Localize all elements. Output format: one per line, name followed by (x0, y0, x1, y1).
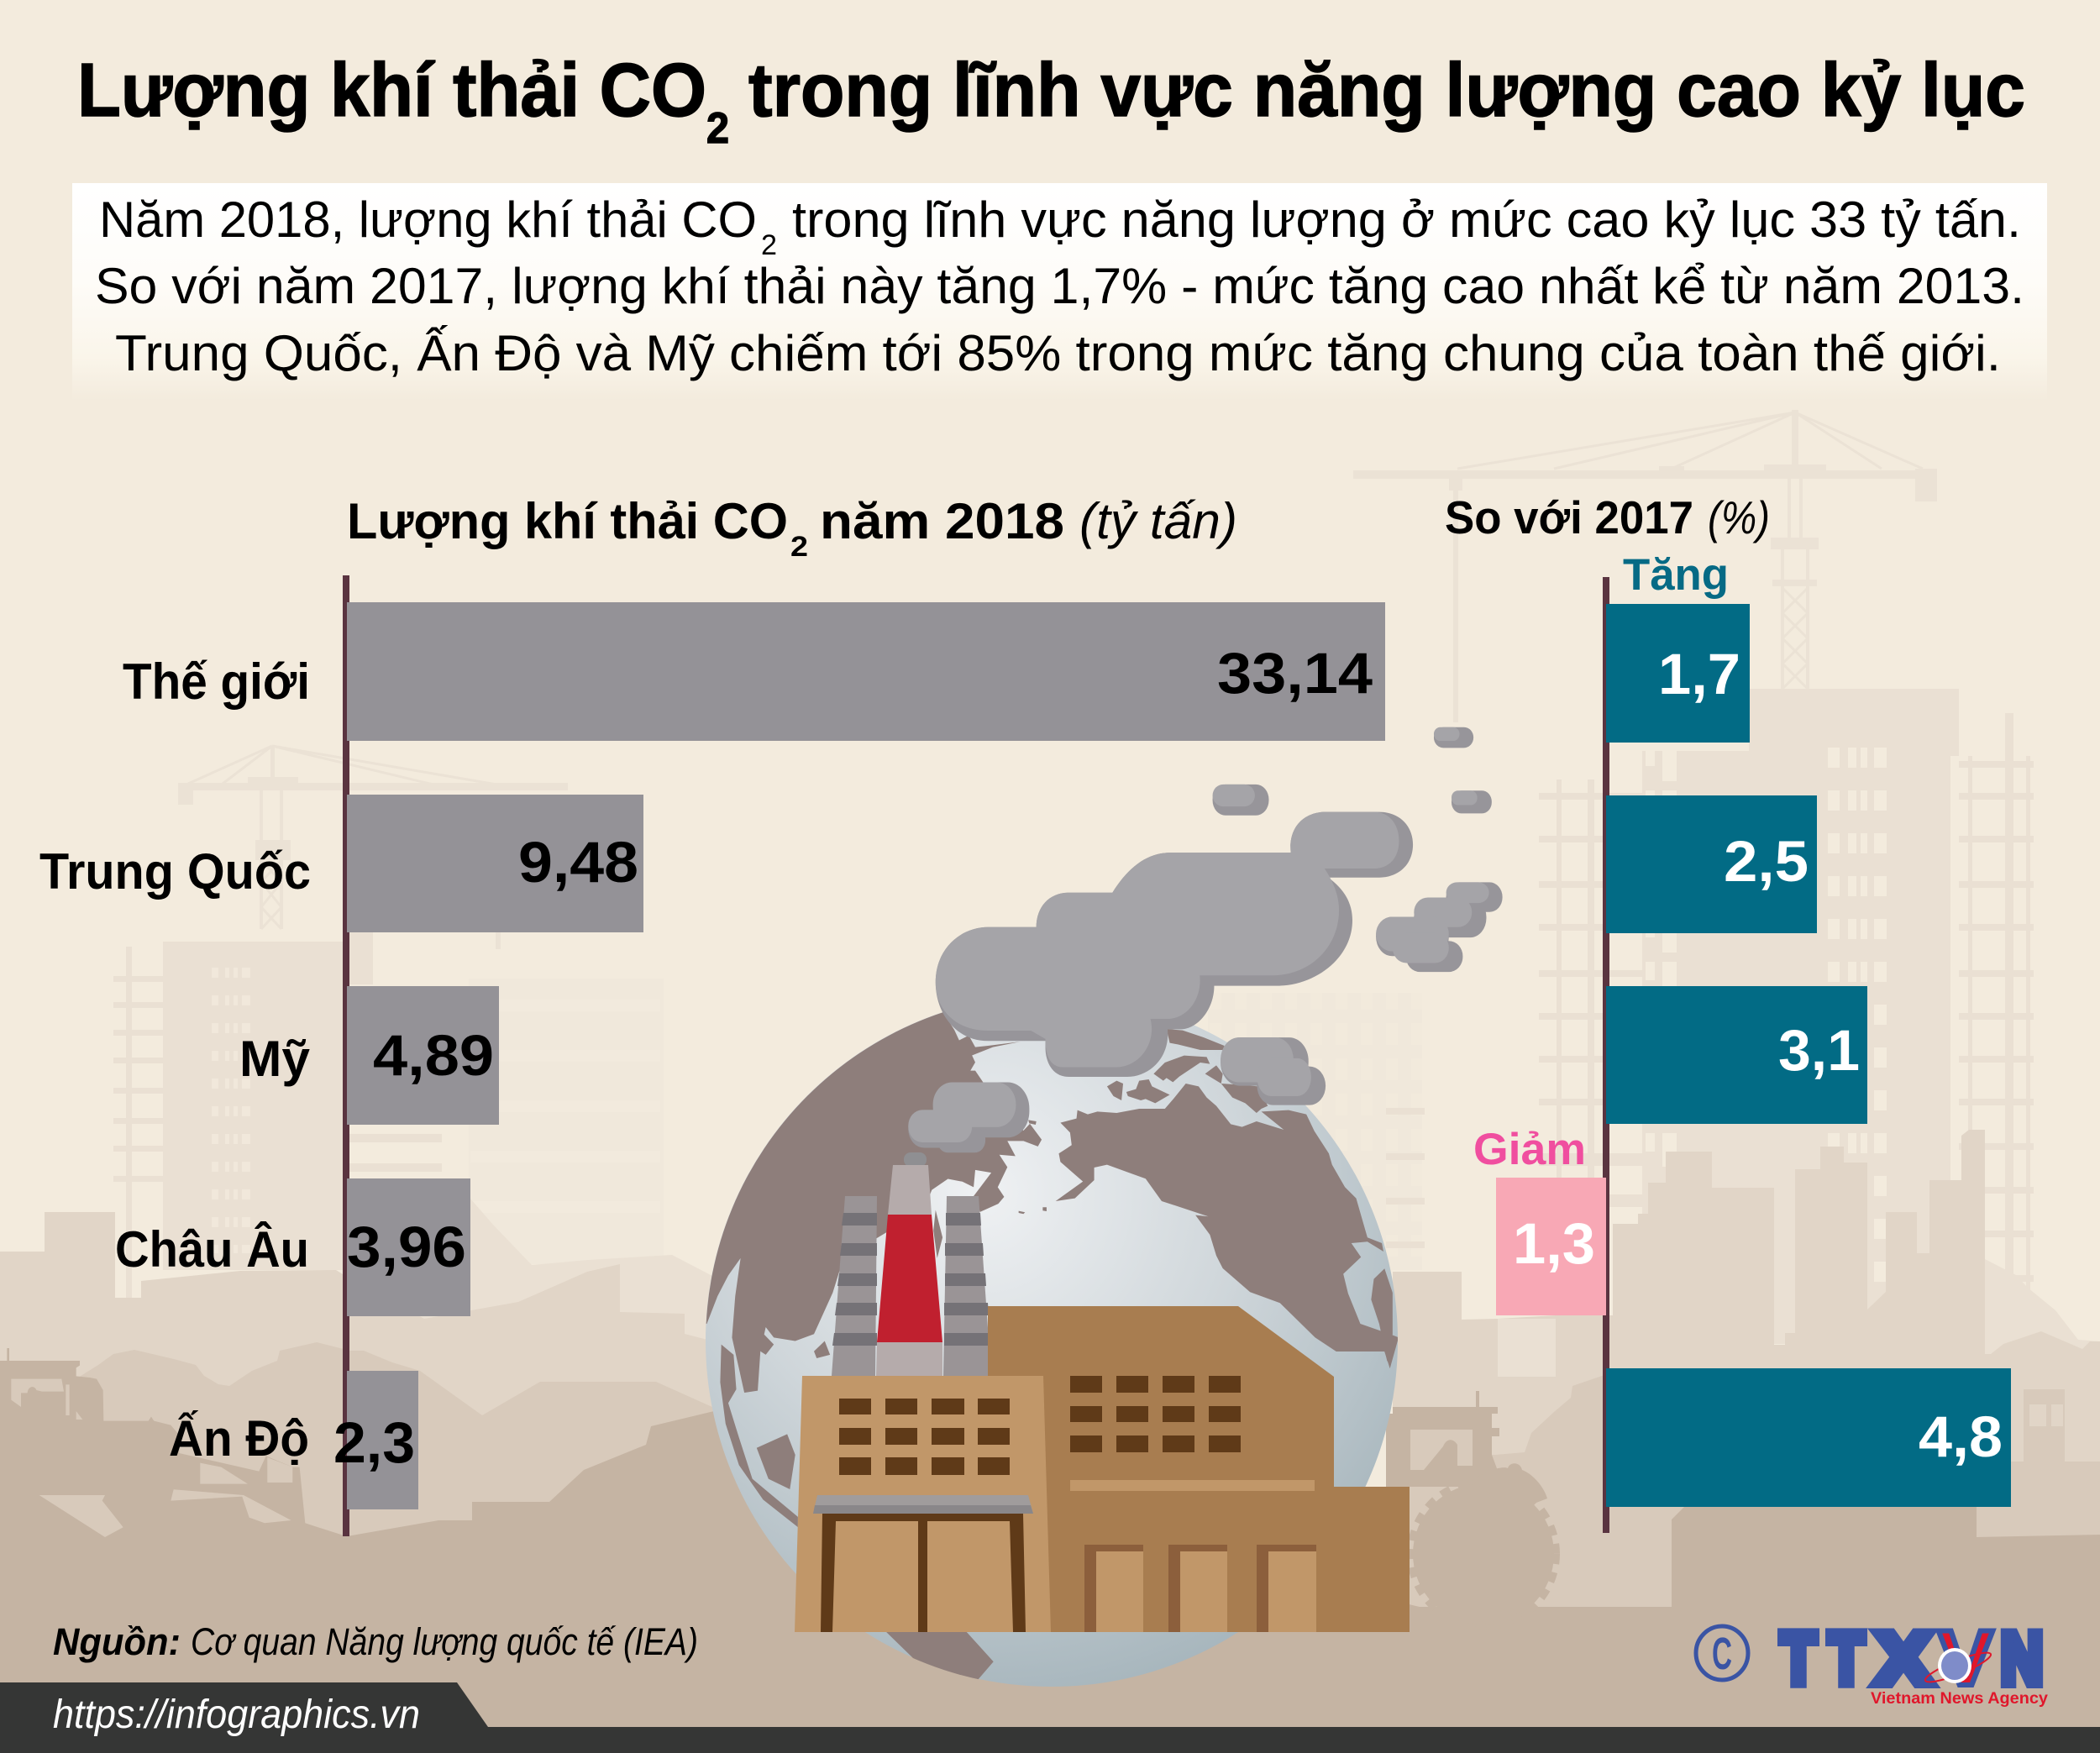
smoke: cloud right of globe (1221, 1037, 1326, 1105)
intro panel (72, 183, 2047, 401)
logo: TTXVN: V (1938, 1614, 1993, 1702)
factory: centre chimney (876, 1152, 942, 1376)
background: scaffolded buildings (113, 689, 2034, 1344)
background: truck (2026, 1391, 2065, 1462)
row: Mỹ (239, 1023, 494, 1088)
icon: smoke clouds (908, 727, 1503, 1152)
chart axis (343, 575, 349, 1536)
row: Thế giới (123, 641, 1373, 710)
logo: TTXVN (1781, 1614, 2048, 1708)
title: trong lĩnh vực năng lượng cao kỷ lục (748, 49, 2025, 133)
intro line 1: 2 (761, 229, 777, 261)
background: light hills (349, 1199, 2100, 1445)
smoke: cloud over chimney (908, 1083, 1029, 1152)
row: Châu Âu (115, 1215, 466, 1279)
source note: Nguồn: (53, 1620, 181, 1663)
logo: TTXVN: T (1829, 1619, 1864, 1699)
background: pale rectangle (1498, 1319, 1556, 1377)
smoke: main cloud (936, 812, 1413, 1077)
factory: right chimney (943, 1196, 991, 1376)
bar: 1,7 (1606, 604, 1750, 743)
background: bulldozer silhouette (0, 1348, 344, 1551)
logo: globe emblem (1923, 1648, 1993, 1687)
chart axis (1603, 577, 1609, 1533)
bar chart: change versus 2017 (1445, 491, 2011, 1533)
source note: Cơ quan Năng lượng quốc tế (IEA) (191, 1620, 698, 1663)
bar: 4,8: 4,8 (1919, 1404, 2003, 1469)
factory: rear strip (1070, 1480, 1315, 1491)
row: Châu Âu: Châu Âu (115, 1221, 309, 1278)
bar: 4,8 (1606, 1368, 2011, 1507)
label: Tăng: Tăng (1623, 550, 1729, 600)
icon: globe (672, 975, 1399, 1687)
title: Lượng khí thải CO (77, 49, 706, 133)
row: Thế giới: 33,14 (1217, 641, 1373, 706)
intro line 1: trong lĩnh vực năng lượng ở mức cao kỷ lục 33 tỷ tấn. (792, 192, 2021, 248)
factory: rear building (988, 1306, 1410, 1632)
row: Châu Âu: 3,96 (347, 1215, 466, 1279)
bar chart: CO2 emissions 2018 (39, 493, 1385, 1536)
factory: rear doors (1084, 1545, 1316, 1632)
background: city skyline (0, 1130, 2100, 1512)
bar: 1,3 decrease: 1,3 (1513, 1211, 1595, 1276)
chart heading: change: (%) (1708, 491, 1770, 543)
intro line 3: Trung Quốc, Ấn Độ và Mỹ chiếm tới 85% trong mức tăng chung của toàn thế giới. (115, 325, 2001, 381)
chart heading: emissions: Lượng khí thải CO (347, 493, 788, 549)
chart heading: emissions (347, 493, 1237, 563)
row: Ấn Độ: 2,3 (333, 1410, 415, 1475)
background: tractor silhouette (1386, 1391, 1556, 1626)
row: Thế giới: Thế giới (123, 653, 310, 710)
title (77, 49, 2025, 153)
footer url: https://infographics.vn (53, 1693, 420, 1737)
background: ground (0, 1411, 2100, 1753)
background: rocky hills (0, 1342, 2100, 1680)
bar: 3,1 (1606, 986, 1867, 1124)
bar: 1,7: 1,7 (1658, 642, 1740, 706)
logo: TTXVN: X (1876, 1619, 1931, 1699)
row: Trung Quốc: 9,48 (518, 830, 638, 895)
row: Ấn Độ (169, 1410, 415, 1475)
factory: front building (795, 1376, 1051, 1632)
bars: grey (347, 602, 1385, 1509)
factory: front doors (821, 1514, 1026, 1632)
intro line 1 (99, 192, 2021, 261)
bar: 3,1: 3,1 (1778, 1018, 1860, 1083)
icon: factory (795, 1152, 1410, 1632)
bar: 2,5: 2,5 (1724, 829, 1809, 894)
intro line 2: So với năm 2017, lượng khí thải này tăng 1,7% - mức tăng cao nhất kể từ năm 2013. (95, 258, 2024, 314)
factory: rear windows (1070, 1376, 1241, 1452)
smoke: right cluster (1376, 882, 1503, 972)
intro line 1: Năm 2018, lượng khí thải CO (99, 192, 757, 248)
factory: awning (813, 1495, 1033, 1514)
row: Ấn Độ: Ấn Độ (169, 1410, 309, 1467)
icon: copyright mark: C (1712, 1629, 1732, 1679)
chart heading: emissions: năm 2018 (820, 493, 1064, 549)
title: 2 (706, 104, 729, 153)
chart heading: change: So với 2017 (1445, 491, 1693, 543)
row: Mỹ: Mỹ (239, 1031, 311, 1087)
logo: TTXVN: T (1781, 1619, 1816, 1699)
chart heading: emissions: 2 (790, 531, 808, 563)
row: Trung Quốc: Trung Quốc (39, 843, 311, 900)
background: cranes (178, 410, 1937, 949)
label: Giảm: Giảm (1473, 1125, 1586, 1174)
row: Trung Quốc (39, 830, 638, 900)
icon: copyright mark (1696, 1626, 1748, 1680)
logo: agency name: Vietnam News Agency (1871, 1690, 2048, 1708)
chart heading: emissions: (tỷ tấn) (1079, 493, 1237, 549)
factory: front windows (839, 1399, 1010, 1475)
smoke: small puffs (1213, 727, 1492, 816)
logo: TTXVN: N (2001, 1619, 2043, 1699)
illustration: globe, smoke and factory (672, 727, 1503, 1687)
factory: left chimney (832, 1196, 877, 1376)
bar: 1,3 decrease (1496, 1178, 1606, 1315)
row: Mỹ: 4,89 (373, 1023, 494, 1088)
footer bar (0, 1682, 2100, 1753)
bar: 2,5 (1606, 795, 1817, 933)
